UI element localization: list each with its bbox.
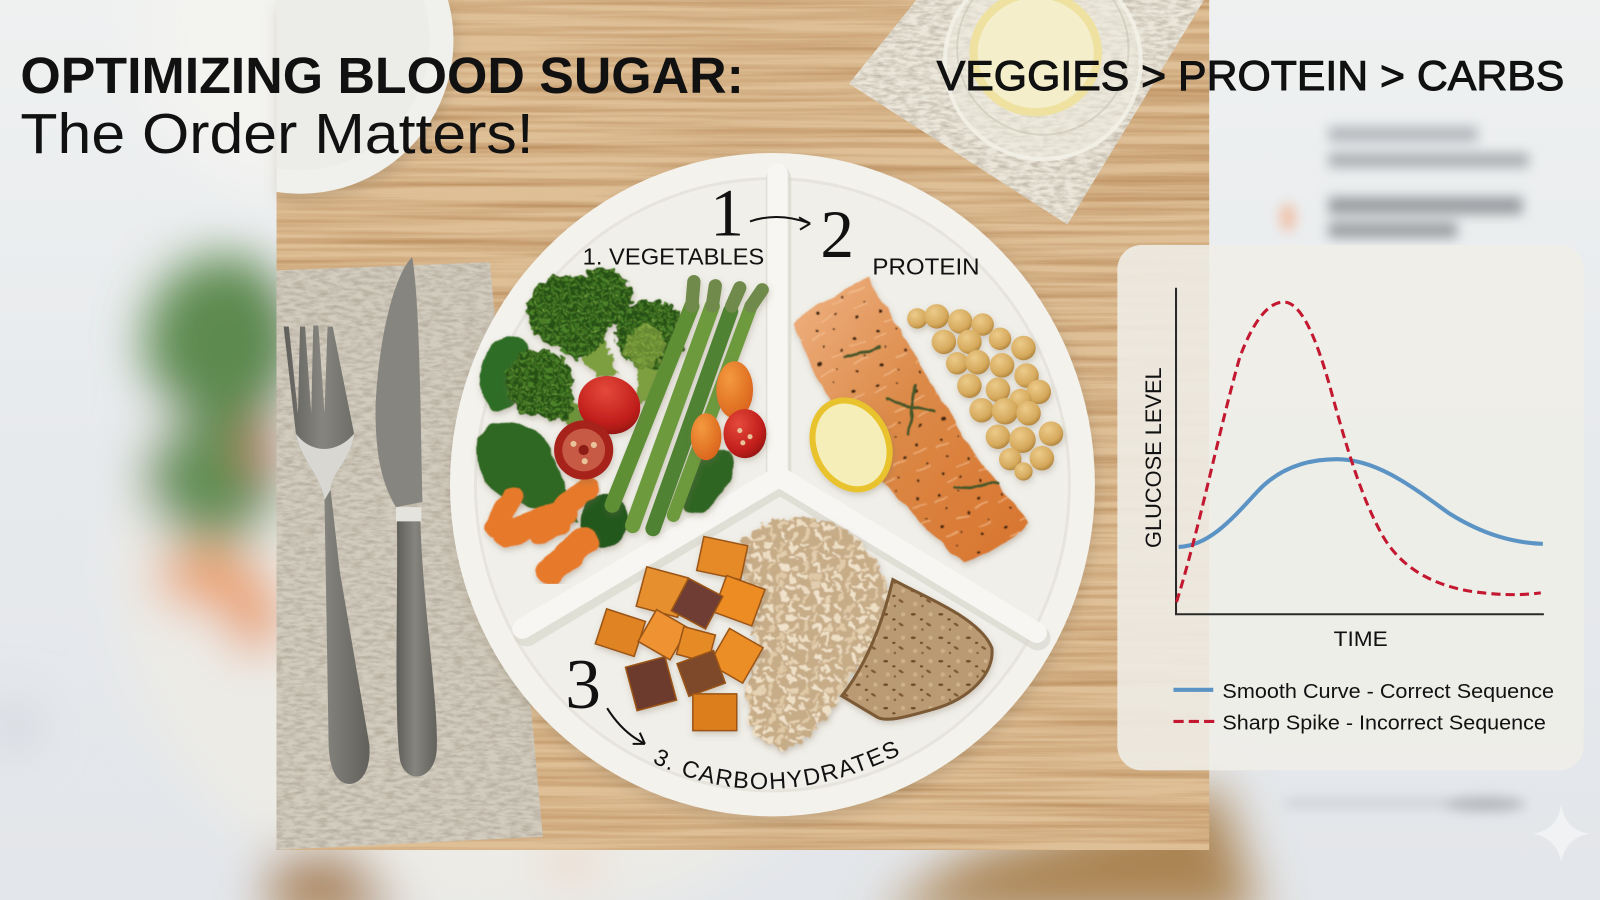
label: vegetables: 1. VEGETABLES <box>583 243 764 269</box>
title: OPTIMIZING BLOOD SUGAR: <box>20 47 744 104</box>
salmon fillet <box>794 277 1029 564</box>
wood table <box>277 0 1209 850</box>
arrow: step 3 to carbohydrates <box>607 708 645 744</box>
linen napkin under cutlery <box>277 262 543 850</box>
white bowl, top left <box>277 0 453 194</box>
legend <box>1173 681 1554 735</box>
brown rice <box>740 517 889 749</box>
main photo: table scene <box>277 0 1209 850</box>
broccoli <box>505 268 686 434</box>
step number 3: 3 <box>565 645 601 724</box>
legend: Smooth Curve - Correct Sequence <box>1222 681 1554 703</box>
heading: eating order: VEGGIES > PROTEIN > CARBS <box>937 52 1564 99</box>
step number 2: 2 <box>820 197 854 272</box>
title: The Order Matters! <box>20 102 534 165</box>
x axis label: TIME <box>1334 627 1388 651</box>
carbohydrates section <box>595 517 992 749</box>
chickpeas <box>907 304 1063 481</box>
roasted sweet potato cubes <box>595 537 765 731</box>
title <box>20 47 744 165</box>
y axis label: GLUCOSE LEVEL <box>1141 367 1166 548</box>
asparagus spears <box>612 282 762 529</box>
lemon slice <box>794 384 908 506</box>
blue curve: correct sequence <box>1179 459 1543 547</box>
label: protein: PROTEIN <box>872 253 980 279</box>
spinach leaves <box>471 329 744 547</box>
icon: lemon water glass <box>944 0 1142 160</box>
icon: fork <box>284 326 370 784</box>
protein section <box>794 277 1063 564</box>
carrots <box>495 490 587 571</box>
bread slice <box>842 580 992 719</box>
icon: sparkle watermark <box>1533 804 1590 862</box>
icon: knife <box>376 257 437 777</box>
linen napkin with glass <box>849 0 1204 224</box>
label: carbohydrates: 3. CARBOHYDRATES <box>654 742 898 790</box>
panel: glucose chart <box>1117 245 1584 770</box>
legend: Sharp Spike - Incorrect Sequence <box>1222 713 1546 735</box>
step number 1: 1 <box>710 176 744 251</box>
chart axes <box>1176 288 1544 614</box>
vegetables section <box>471 268 766 571</box>
red dashed curve: incorrect sequence <box>1177 302 1541 602</box>
arrow: step 1 to step 2 <box>750 217 810 230</box>
panel: divided plate <box>448 153 1100 824</box>
tomatoes <box>554 361 766 480</box>
